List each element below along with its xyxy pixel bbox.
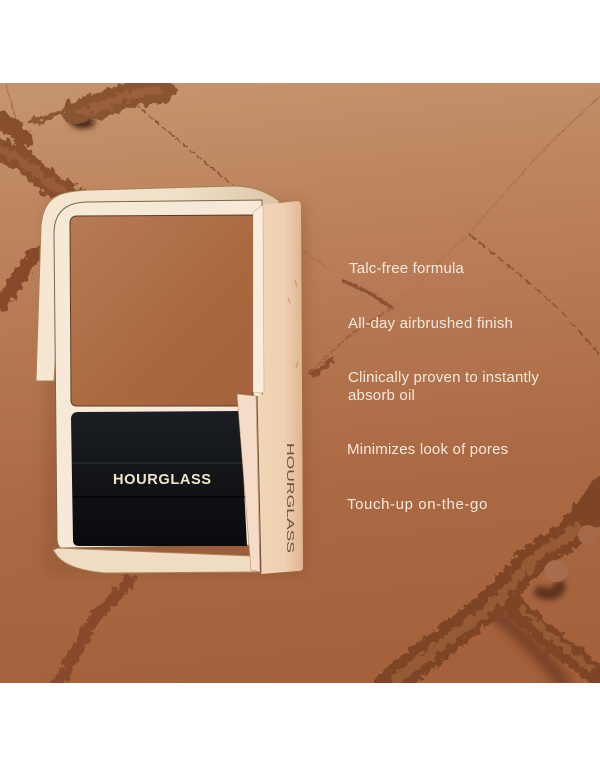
benefit: oil absorption: Clinically proven to instantly	[348, 369, 539, 386]
powder crumbles: bottom right	[494, 612, 565, 684]
side hinge panel	[257, 201, 303, 574]
benefit: touch-up: Touch-up on-the-go	[347, 496, 488, 513]
side speck marks	[288, 280, 298, 368]
crack lines	[6, 84, 600, 372]
compact shadow	[44, 200, 308, 576]
black puff	[71, 411, 247, 546]
powder crumbles: top left	[0, 84, 600, 686]
puff logo: HOURGLASS	[113, 472, 212, 488]
benefit: talc-free: Talc-free formula	[349, 260, 464, 277]
benefit: pores: Minimizes look of pores	[347, 441, 508, 458]
benefit: airbrushed finish: All-day airbrushed finish	[348, 315, 513, 332]
puff fold lines	[72, 463, 245, 497]
compact back lid	[36, 186, 279, 381]
compact case	[36, 186, 308, 576]
compact lower rim	[53, 548, 260, 573]
side engraved logo: HOURGLASS	[284, 443, 295, 554]
hinge front tab	[237, 394, 260, 572]
product photograph with powder background and compact	[0, 83, 600, 683]
benefit: oil absorption	[348, 369, 539, 404]
powder background	[0, 83, 600, 686]
powder pan	[70, 215, 253, 406]
benefit: oil absorption: absorb oil	[348, 387, 415, 404]
inner frame	[54, 200, 262, 548]
powder crumbles: bottom left	[58, 580, 130, 684]
hinge strip	[253, 205, 264, 393]
